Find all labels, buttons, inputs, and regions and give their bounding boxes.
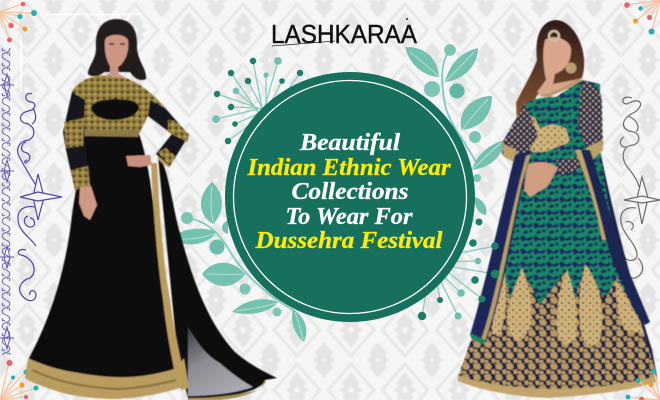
purple border strip left	[0, 48, 14, 355]
skirt	[28, 134, 180, 380]
circle headline text: Dussehra Festival	[254, 228, 443, 254]
sleeves	[502, 103, 538, 165]
corner burst: bottom right	[626, 368, 660, 400]
left model in black gown	[25, 19, 277, 400]
hands	[126, 155, 152, 167]
gold lower skirt	[458, 265, 657, 392]
circle headline text: To Wear For	[286, 204, 413, 230]
right burst of teal dots	[418, 218, 495, 320]
veil front right	[578, 150, 650, 325]
bodice	[72, 75, 165, 135]
veil gold edge	[151, 163, 187, 388]
right hem piece	[178, 358, 189, 390]
veil train	[158, 156, 277, 398]
skirt green fabric	[498, 150, 628, 310]
earring	[566, 62, 576, 74]
right model in green gown	[458, 20, 657, 398]
veil front left	[470, 150, 532, 342]
hair	[88, 19, 146, 80]
circle headline text	[246, 130, 451, 254]
circle headline text: Collections	[292, 179, 408, 205]
veil gray sheer	[188, 327, 253, 396]
gold hem	[25, 358, 180, 399]
white frame lines	[21, 14, 142, 92]
hem embroidery	[32, 370, 176, 389]
corner burst: top right	[624, 0, 660, 34]
gold panels	[492, 265, 644, 348]
facial features	[109, 43, 125, 45]
logo: Lashkaraa: LASHKARAA	[271, 19, 418, 49]
hem band	[458, 375, 657, 398]
gold waist embroidery	[522, 115, 570, 152]
main green circle	[225, 72, 475, 322]
gray scroll ornament right	[620, 97, 660, 300]
face and neck	[100, 35, 130, 80]
folded hands	[524, 162, 558, 197]
corner burst: top left	[0, 2, 37, 42]
right burst dots over gown	[478, 242, 499, 303]
left burst of teal dots	[212, 57, 303, 144]
circle headline text: Beautiful	[299, 130, 400, 156]
maang tikka	[549, 31, 559, 41]
bottom left leaf branch	[170, 182, 306, 342]
circle headline text: Indian Ethnic Wear	[246, 155, 451, 181]
black bust panel	[91, 98, 139, 120]
veil gold trim	[188, 380, 266, 400]
top right leaf branch	[405, 44, 505, 215]
bodice	[524, 80, 600, 150]
left sleeve	[63, 92, 90, 190]
long hair	[516, 20, 584, 122]
right sleeve	[148, 100, 189, 166]
face and neck	[537, 37, 580, 98]
skirt base navy	[458, 150, 657, 392]
corner burst: bottom left	[0, 360, 38, 400]
purple scroll ornament left	[18, 93, 62, 301]
